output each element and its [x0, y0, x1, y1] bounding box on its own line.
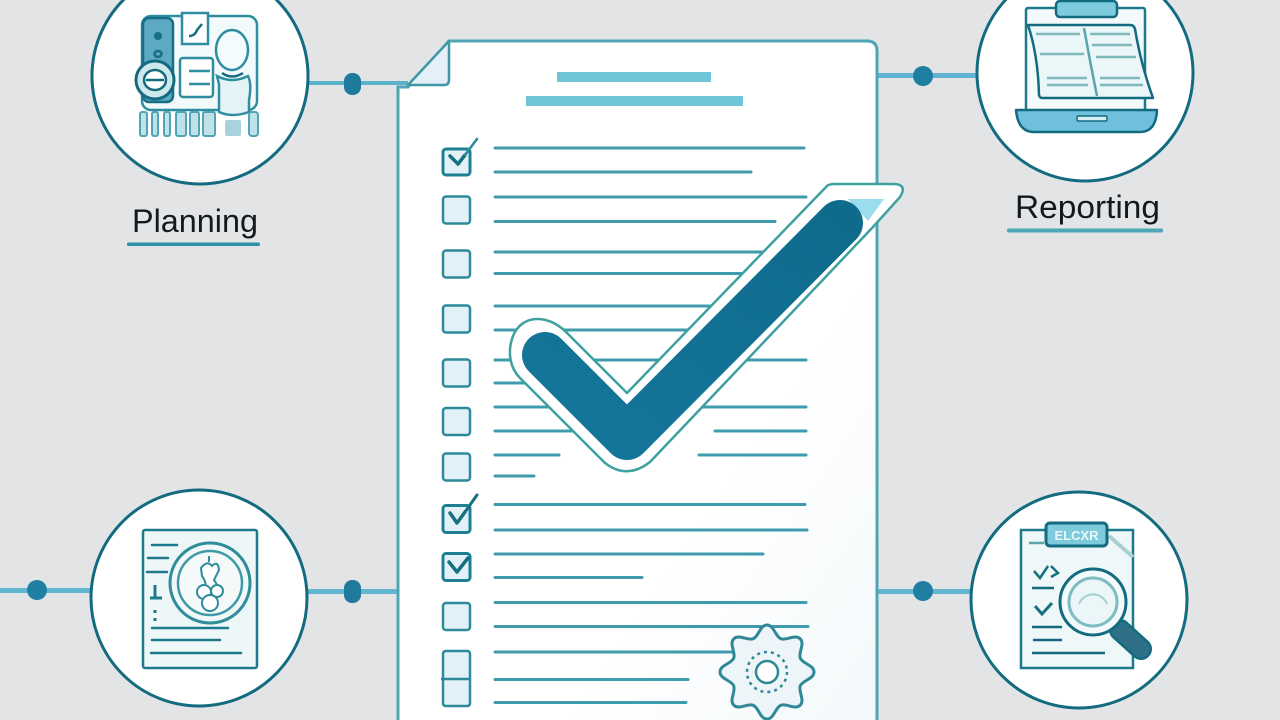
review circle — [971, 492, 1187, 708]
document sheet — [398, 41, 877, 720]
connector: bottom left outer — [0, 580, 92, 600]
reporting circle — [977, 0, 1193, 181]
connector: bottom left inner — [306, 580, 400, 603]
label: reporting: Reporting — [1015, 189, 1160, 225]
planning circle — [92, 0, 308, 184]
icon: report with scan — [143, 530, 257, 668]
label: planning: Planning — [132, 203, 258, 239]
icon: document with magnifier — [1021, 523, 1141, 668]
large check mark — [510, 184, 903, 471]
panel: reporting — [977, 0, 1193, 232]
panel: analysis — [91, 490, 307, 706]
analysis circle — [91, 490, 307, 706]
panel: review — [971, 492, 1187, 708]
label underline: planning — [127, 242, 260, 246]
check marks in boxes — [449, 139, 477, 572]
connector: top left — [308, 73, 408, 95]
clipboard tab text: ELCXR — [1054, 528, 1099, 543]
connector: bottom right — [875, 581, 973, 601]
panel: checklist document — [398, 41, 903, 720]
label underline: reporting — [1007, 228, 1163, 232]
checklist text lines — [495, 148, 808, 702]
panel: planning — [92, 0, 308, 246]
connector: top right — [875, 66, 979, 86]
checkboxes — [441, 149, 470, 706]
gear icon — [720, 625, 814, 719]
check body — [545, 223, 840, 437]
icon: planning board — [136, 13, 257, 115]
icon: laptop report — [1016, 1, 1157, 132]
document title bars — [526, 72, 743, 106]
light tip triangle — [848, 199, 884, 221]
check outline — [510, 184, 903, 471]
folded corner — [408, 41, 449, 85]
icon: planning bottom bars — [140, 112, 258, 136]
